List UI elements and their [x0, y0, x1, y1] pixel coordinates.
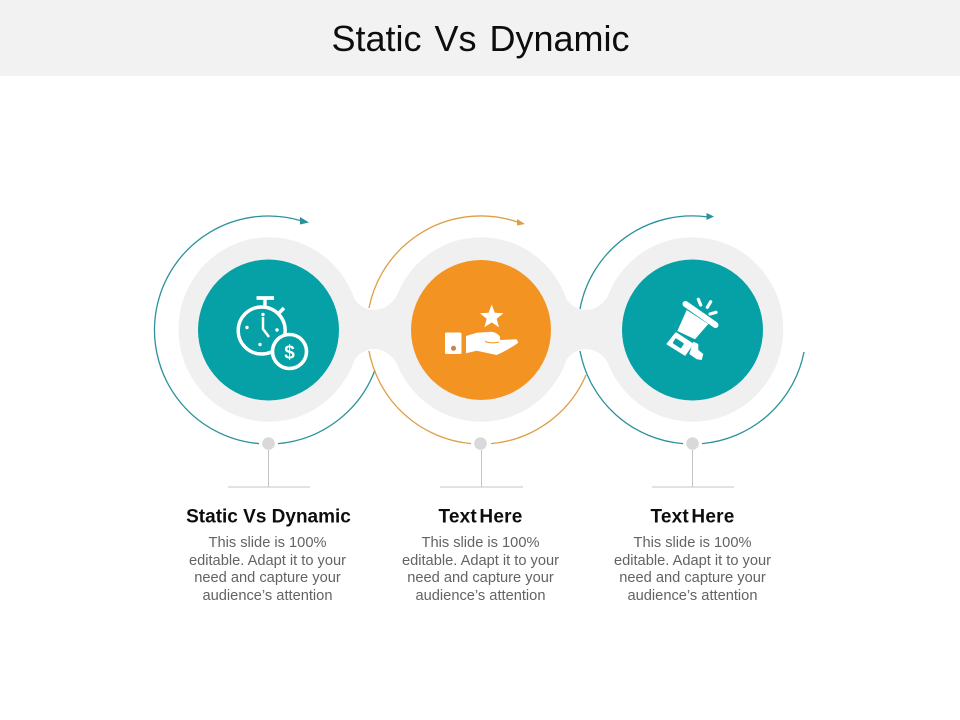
- text block 1: need and capture your: [194, 570, 341, 586]
- teal circle 3: [622, 260, 763, 400]
- icon: hand with star: [445, 304, 518, 355]
- pin connector 1: [228, 437, 310, 487]
- orange circle 2: [411, 260, 551, 400]
- text block 3: editable. Adapt it to your: [614, 553, 771, 569]
- arc arrow 3: [580, 213, 804, 444]
- text block 1: audience’s attention: [203, 588, 332, 604]
- text block 2: audience’s attention: [416, 588, 545, 604]
- text block 3: need and capture your: [619, 570, 766, 586]
- pin connector 2: [440, 437, 523, 487]
- text block 1: [186, 506, 351, 604]
- title band: Static Vs Dynamic: [331, 18, 630, 59]
- text block 3: This slide is 100%: [634, 535, 752, 551]
- arc arrow 1: [154, 216, 375, 444]
- text block 2: This slide is 100%: [422, 535, 540, 551]
- text block 2: editable. Adapt it to your: [402, 553, 559, 569]
- title band: [0, 0, 960, 76]
- text block 2: need and capture your: [407, 570, 554, 586]
- text block 1: editable. Adapt it to your: [189, 553, 346, 569]
- text block 1: Static Vs Dynamic: [186, 506, 351, 528]
- teal circle 1: [198, 260, 339, 400]
- text block 1: This slide is 100%: [208, 535, 326, 551]
- text block 2: Text Here: [438, 506, 522, 528]
- text block 3: Text Here: [650, 506, 734, 528]
- icon: megaphone: [667, 299, 716, 360]
- icon: stopwatch with dollar: [238, 298, 306, 368]
- text block 3: [614, 506, 771, 604]
- icon: stopwatch with dollar: $: [284, 342, 295, 364]
- text block 3: audience’s attention: [628, 588, 757, 604]
- grey connected rings: [178, 237, 783, 422]
- text block 2: [402, 506, 559, 604]
- arc arrow 2: [369, 216, 586, 444]
- pin connector 3: [652, 437, 734, 487]
